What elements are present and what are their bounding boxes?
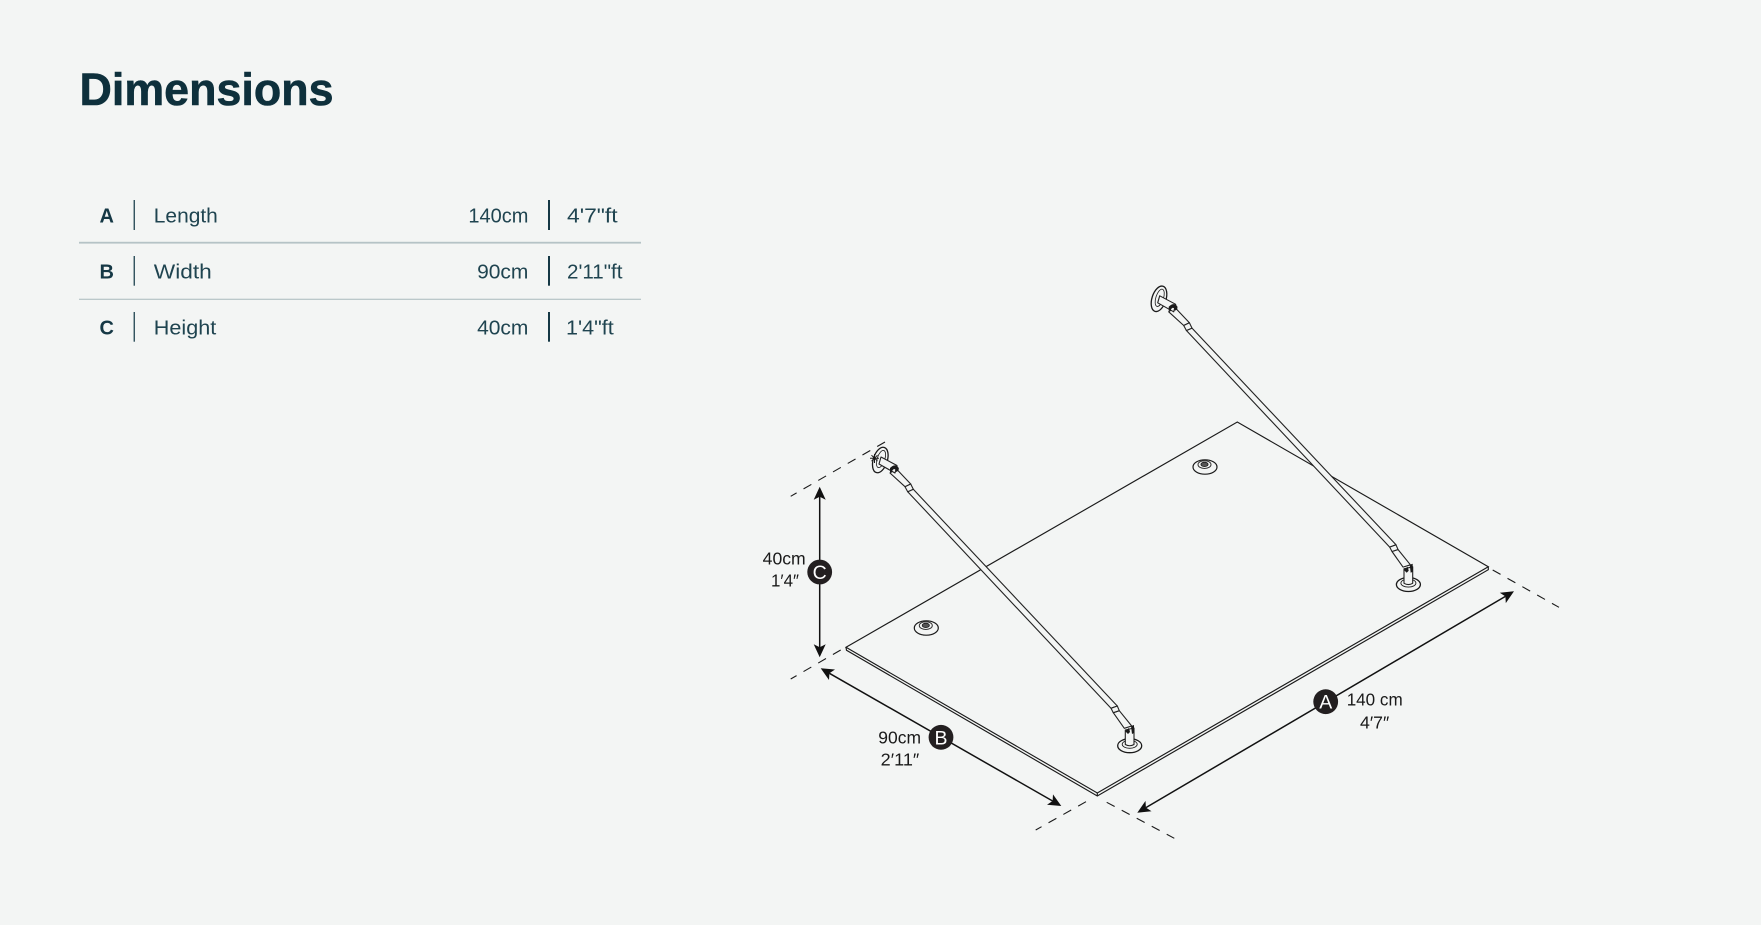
dimension A: length arrow: A: [1319, 692, 1332, 714]
dimension C: height arrow: [763, 487, 832, 657]
row C: height: C: [99, 318, 114, 340]
row C: height: [99, 312, 614, 342]
dimension B: width arrow: 90cm: [878, 727, 921, 747]
dimension C: height arrow: 40cm: [763, 548, 806, 568]
mounting disc left: [914, 621, 938, 635]
title: Dimensions: [80, 64, 334, 115]
dimension C: height arrow: C: [813, 562, 827, 584]
dimensions table: [79, 200, 641, 342]
row A: length: Length: [154, 206, 218, 228]
row A: length: [99, 200, 618, 230]
dashed guide lines: [791, 442, 1559, 838]
dimension A: length arrow: [1137, 591, 1514, 813]
row B: width: [99, 256, 623, 286]
mounting disc right: [1193, 460, 1217, 474]
canopy panel: [846, 422, 1488, 796]
row C: height: Height: [154, 318, 217, 340]
dimension B: width arrow: B: [934, 727, 948, 749]
row A: length: A: [99, 206, 114, 228]
row A: length: 140cm: [468, 206, 528, 228]
dimension A: length arrow: 140 cm: [1347, 690, 1403, 710]
support strut left: [870, 445, 1142, 753]
row C: height: 1'4"ft: [566, 318, 614, 340]
dimension C: height arrow: 1′4″: [771, 571, 799, 591]
row C: height: 40cm: [477, 318, 528, 340]
row A: length: 4'7"ft: [567, 206, 618, 228]
row B: width: 90cm: [477, 262, 528, 284]
canopy diagram: [763, 284, 1559, 838]
row B: width: Width: [154, 262, 212, 284]
row B: width: 2'11"ft: [567, 262, 623, 284]
support strut right: [1148, 284, 1420, 592]
dimension A: length arrow: 4′7″: [1360, 712, 1389, 732]
dimension B: width arrow: [821, 668, 1061, 806]
dimension B: width arrow: 2′11″: [881, 749, 919, 769]
row B: width: B: [99, 262, 114, 284]
